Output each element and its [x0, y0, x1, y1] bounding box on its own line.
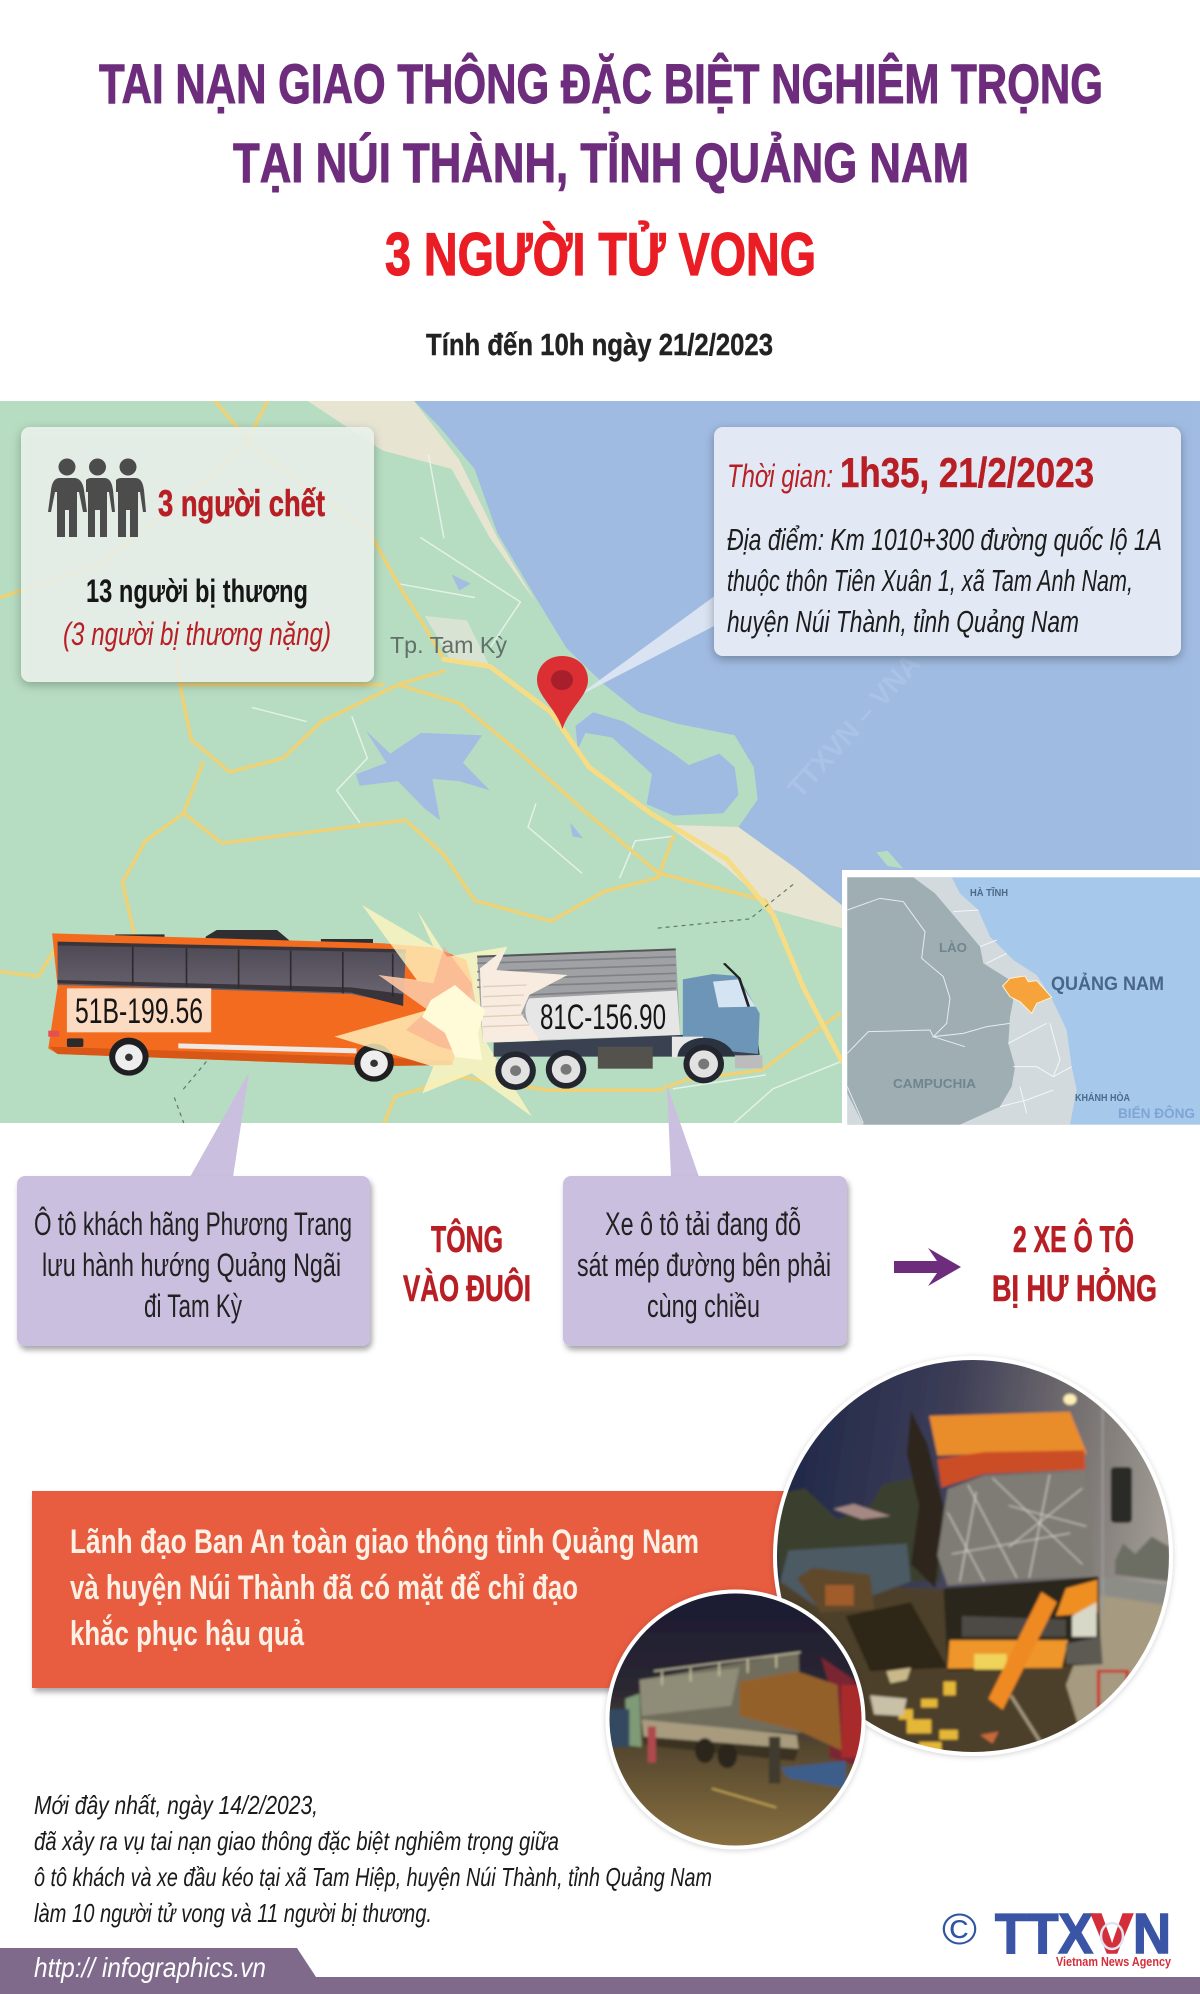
illustration: truck	[477, 947, 762, 1090]
arrow	[894, 1248, 961, 1286]
inset label: Quang Nam: QUẢNG NAM	[1051, 973, 1164, 995]
inset label: East Sea: BIỂN ĐÔNG	[1118, 1104, 1195, 1121]
headline: 3 deaths: 3 NGƯỜI TỬ VONG	[385, 221, 816, 288]
Quang Nam province	[1003, 976, 1052, 1013]
ground	[778, 1580, 1078, 1752]
location text: huyện Núi Thành, tỉnh Quảng Nam	[727, 604, 1079, 639]
callout pointer	[575, 595, 716, 698]
banner: officials	[32, 1491, 802, 1688]
label: two vehicles damaged: 2 XE Ô TÔ	[1013, 1218, 1134, 1260]
panel: bus note: đi Tam Kỳ	[144, 1288, 242, 1324]
map: minor roads	[253, 455, 842, 1123]
Laos and Cambodia	[847, 877, 1015, 1125]
label: time: Thời gian:	[727, 458, 833, 494]
logo: TTXVN	[995, 1902, 1172, 1969]
banner: officials: khắc phục hậu quả	[70, 1615, 305, 1653]
map: beach	[306, 400, 536, 602]
bus front	[907, 1411, 944, 1588]
illustration: explosion glow	[335, 905, 532, 1117]
map: island	[876, 851, 903, 868]
location text	[727, 522, 1162, 639]
note: previous accident: làm 10 người tử vong và 11 người bị thương.	[34, 1898, 432, 1928]
logo: copyright mark: ©	[942, 1905, 977, 1954]
note: previous accident: đã xảy ra vụ tai nạn giao thông đặc biệt nghiêm trọng giữa	[34, 1826, 559, 1856]
panel: bus note	[17, 1176, 370, 1346]
map: city area	[425, 616, 490, 666]
banner: officials: Lãnh đạo Ban An toàn giao thông tỉnh Quảng Nam	[70, 1523, 699, 1561]
panel: bus note: Ô tô khách hãng Phương Trang	[34, 1206, 352, 1242]
icon: location pin	[537, 656, 588, 729]
inset label: Ha Tinh: HÀ TĨNH	[970, 886, 1008, 899]
photo: wrecked bus	[770, 1350, 1180, 1775]
inset label: Laos: LÀO	[939, 940, 967, 955]
panel: casualties	[21, 427, 374, 682]
map label: Tam Ky: Tp. Tam Kỳ	[390, 632, 508, 658]
logo: TTXVN: V	[1091, 1902, 1133, 1966]
map: reservoir	[356, 731, 490, 820]
inset locator map	[842, 870, 1200, 1125]
plate: truck: 81C-156.90	[540, 998, 666, 1037]
panel: truck note	[563, 1176, 847, 1346]
panel: bus note: lưu hành hướng Quảng Ngãi	[42, 1247, 341, 1283]
trees and building	[772, 1478, 944, 1582]
pointer: bus note	[190, 1072, 249, 1177]
note: previous accident: ô tô khách và xe đầu kéo tại xã Tam Hiệp, huyện Núi Thành, tỉnh Quảng Nam	[34, 1862, 712, 1892]
logo: TTXVN: N	[1133, 1902, 1171, 1966]
footer bar: http:// infographics.vn	[34, 1952, 266, 1983]
panel: truck note: Xe ô tô tải đang đỗ	[605, 1206, 801, 1242]
panel: time and place	[714, 427, 1181, 656]
date line: Tính đến 10h ngày 21/2/2023	[426, 327, 773, 362]
stat: seriously injured: (3 người bị thương nặng)	[63, 616, 331, 652]
debris	[899, 1682, 958, 1752]
title	[99, 52, 1103, 194]
map panel	[0, 400, 1200, 1123]
label: rear-ended: VÀO ĐUÔI	[403, 1267, 531, 1309]
stat: deaths: 3 người chết	[158, 483, 325, 524]
inset label: Khanh Hoa: KHÁNH HÒA	[1075, 1091, 1130, 1104]
note: previous accident: Mới đây nhất, ngày 14/2/2023,	[34, 1790, 318, 1820]
icon: three people	[48, 458, 146, 537]
panel: truck note: sát mép đường bên phải	[577, 1247, 831, 1283]
logo: TTXVN: Vietnam News Agency	[1056, 1954, 1172, 1969]
stat: injured: 13 người bị thương	[86, 573, 308, 609]
map: yellow roads	[0, 400, 842, 1123]
inset label: Cambodia: CAMPUCHIA	[893, 1076, 977, 1091]
map: sea	[414, 401, 1200, 906]
pointer: truck note	[667, 1085, 699, 1177]
label: two vehicles damaged	[992, 1218, 1157, 1309]
note: previous accident	[34, 1790, 712, 1928]
logo: TTXVN: TTX	[995, 1902, 1093, 1966]
Vietnam territory	[847, 877, 1077, 1125]
label: rear-ended: TÔNG	[431, 1218, 503, 1260]
banner: officials: và huyện Núi Thành đã có mặt để chỉ đạo	[70, 1569, 578, 1607]
photo: wrecked truck	[600, 1585, 870, 1855]
illustration: bus	[48, 930, 473, 1082]
label: rear-ended	[403, 1218, 531, 1309]
panel: truck note: cùng chiều	[647, 1288, 760, 1324]
footer bar	[0, 1948, 1200, 1994]
watermark: TTXVN – VNA	[781, 648, 926, 804]
illustration: collision flash	[422, 985, 485, 1060]
plate: bus: 51B-199.56	[75, 992, 203, 1031]
value: time: 1h35, 21/2/2023	[840, 449, 1094, 496]
title: TẠI NÚI THÀNH, TỈNH QUẢNG NAM	[233, 131, 969, 194]
map: lagoon	[576, 712, 739, 816]
